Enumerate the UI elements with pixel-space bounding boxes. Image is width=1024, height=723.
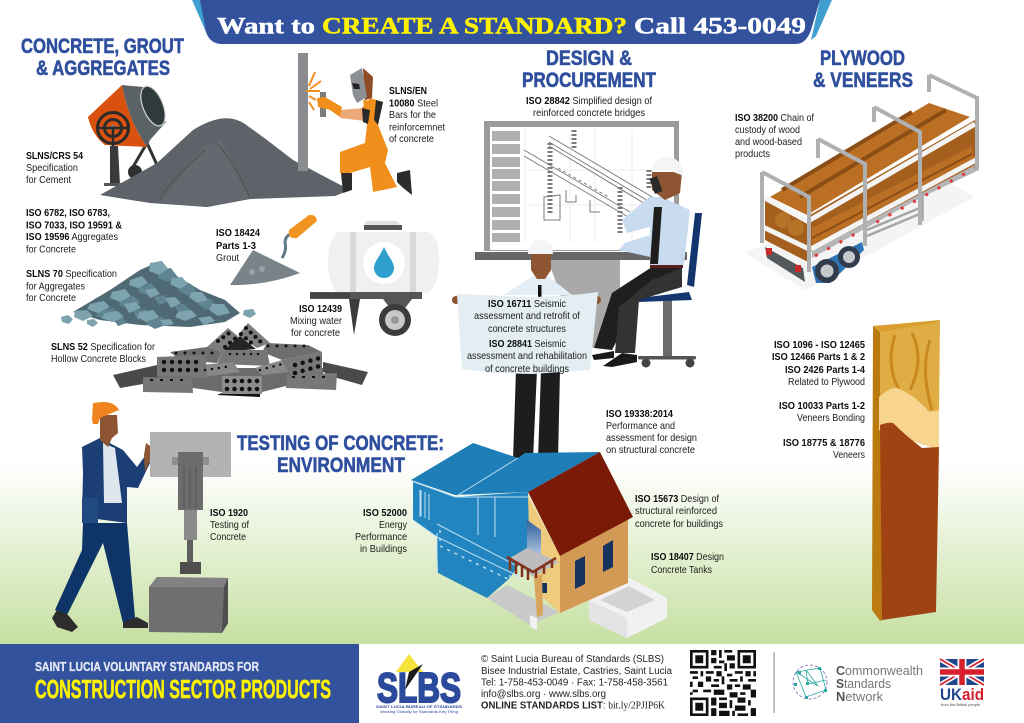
trailer white rails: [763, 124, 976, 249]
text: ISO 38200: ISO 38200 Chain of: [735, 112, 814, 124]
logo: UK aid: from the British people: [941, 702, 981, 707]
text: SLNS/CRS 54: Specification: [26, 162, 78, 174]
house slab: [487, 585, 559, 625]
house yellow gable: [528, 495, 560, 613]
footer panel: [0, 644, 1024, 723]
text: ISO 38200: and wood-based: [735, 136, 802, 148]
illustration: plywood plank: [872, 320, 940, 621]
logo: UK aid: UKaid: [940, 685, 984, 704]
text: ISO 19338:2014: ISO 19338:2014: [606, 408, 673, 420]
text: plywood standards: [772, 339, 865, 461]
text: ISO 18407: ISO 18407 Design: [651, 551, 724, 563]
bridge drawing: [524, 130, 659, 233]
heading: concrete, grout and aggregates: [21, 35, 184, 80]
water drop icon: [374, 247, 394, 278]
logs body: [810, 120, 975, 252]
footer panel: CONSTRUCTION SECTOR PRODUCTS: [35, 674, 331, 704]
house tan side wall: [560, 519, 628, 613]
contact details: info@slbs.org · www.slbs.org: [481, 689, 606, 700]
heading: concrete, grout and aggregates: CONCRETE, GROUT: [21, 35, 184, 58]
logo: SLBS: SLBS: [377, 664, 461, 711]
divider: [774, 652, 775, 713]
worker head and hat: [100, 415, 118, 447]
text: ISO 52000: in Buildings: [360, 543, 407, 555]
text: plywood standards: ISO 2426 Parts 1-4: [785, 364, 865, 376]
text: ISO 16711 and ISO 28841 on blueprint: concrete structures: [488, 323, 566, 335]
QR code: [690, 650, 756, 716]
text: ISO 15673: [635, 493, 723, 530]
header banner: [192, 0, 832, 44]
text: SLNS/EN 10080: [389, 85, 445, 145]
jackhammer: [150, 432, 231, 477]
logo: UK aid: [940, 659, 984, 707]
text: ISO 28842: [526, 95, 652, 119]
centre blocks: [217, 350, 270, 366]
text: ISO 52000: Energy: [379, 519, 408, 531]
illustration: cement pile: [100, 118, 350, 207]
text: ISO 12439: Mixing water: [290, 315, 342, 327]
text: ISO 16711 and ISO 28841 on blueprint: assessment and rehabilitation: [467, 350, 587, 362]
illustration: trowel: [230, 215, 317, 285]
text: aggregates for concrete: ISO 19596 Aggregates: [26, 231, 118, 243]
text: plywood standards: ISO 18775 & 18776: [783, 437, 865, 449]
illustration: design board with bridge drawing: [475, 121, 687, 350]
text: ISO 12439: [290, 303, 342, 339]
house balcony: [510, 548, 559, 577]
welder body: [340, 100, 397, 192]
text: SLNS/EN 10080: of concrete: [389, 133, 434, 145]
text: plywood standards: Veneers Bonding: [797, 412, 865, 424]
banner text: Want to: [217, 14, 315, 38]
illustration: house cross-section: [411, 443, 667, 638]
text: SLNS 70: for Aggregates: [26, 280, 85, 292]
text: ISO 19338:2014: on structural concrete: [606, 444, 695, 456]
contact details: Bisee Industrial Estate, Castries, Saint Lucia: [481, 666, 672, 677]
text: SLNS/EN 10080: 10080 Steel: [389, 98, 438, 110]
heading: testing of concrete, environment: [237, 432, 444, 477]
contact details: © Saint Lucia Bureau of Standards (SLBS): [481, 654, 664, 665]
logo: SLBS: SAINT LUCIA BUREAU OF STANDARDS: [376, 705, 463, 709]
text: SLNS 70: for Concrete: [26, 292, 76, 304]
text: ISO 18407: [651, 551, 724, 576]
heading: design and procurement: DESIGN &: [546, 47, 632, 70]
text: ISO 28842: ISO 28842 Simplified design of: [526, 95, 652, 107]
logo: SLBS: [376, 654, 463, 714]
worker legs: [55, 523, 135, 623]
illustration: worker with jackhammer: [52, 402, 231, 633]
text: ISO 16711 and ISO 28841 on blueprint: ISO 16711 Seismic: [488, 298, 566, 310]
text: SLNS 70: [26, 268, 117, 304]
text: ISO 18424: ISO 18424: [216, 227, 260, 239]
text: ISO 16711 and ISO 28841 on blueprint: of concrete buildings: [485, 363, 569, 375]
contact details: ONLINE STANDARDS LIST: bit.ly/2PJIP6K: [481, 700, 666, 712]
text: ISO 12439: ISO 12439: [299, 303, 342, 315]
text: plywood standards: Related to Plywood: [788, 376, 865, 388]
text: SLNS/CRS 54: for Cement: [26, 174, 71, 186]
text: SLNS 52: Hollow Concrete Blocks: [51, 353, 146, 365]
text: ISO 19338:2014: assessment for design: [606, 432, 697, 444]
banner text: [217, 14, 806, 38]
board swatches: [492, 131, 520, 242]
text: ISO 18424: [216, 227, 260, 264]
welder torch: [320, 92, 326, 117]
heading: design and procurement: PROCUREMENT: [522, 69, 656, 92]
text: ISO 16711 and ISO 28841 on blueprint: assessment and retrofit of: [474, 310, 580, 322]
banner text: Call 453-0049: [634, 14, 806, 38]
illustration: steel bar and welder: [298, 53, 412, 195]
back row: [170, 347, 223, 363]
text: ISO 38200: custody of wood: [735, 124, 800, 136]
house blue walls: [413, 482, 530, 598]
text: ISO 12439: for concrete: [291, 327, 340, 339]
text: ISO 18407: Concrete Tanks: [651, 564, 712, 576]
text: ISO 1920: ISO 1920: [210, 507, 248, 519]
side blocks: [157, 355, 208, 378]
text: ISO 52000: ISO 52000: [363, 507, 407, 519]
text: ISO 38200: [735, 112, 814, 160]
base wedges: [113, 365, 157, 388]
contact details: [481, 654, 672, 712]
logs top layer: [770, 103, 970, 215]
text: ISO 52000: [355, 507, 408, 555]
peak blocks: [207, 328, 240, 353]
house red roof: [528, 452, 633, 556]
illustration: water tank trailer: [310, 221, 439, 336]
trailer stanchions: [762, 75, 977, 272]
banner text: CREATE A STANDARD?: [322, 14, 627, 38]
text: plywood standards: ISO 1096 - ISO 12465: [774, 339, 865, 351]
trailer fender and wheels: [812, 242, 864, 283]
text: ISO 19338:2014: [606, 408, 697, 456]
log ends: [765, 200, 808, 262]
trousers: [594, 267, 682, 350]
text: ISO 1920: Concrete: [210, 531, 246, 543]
illustration: hollow concrete blocks: [113, 323, 368, 397]
text: plywood standards: Veneers: [833, 449, 865, 461]
text: ISO 18424: Parts 1-3: [216, 240, 256, 252]
text: ISO 38200: products: [735, 148, 770, 160]
text: ISO 1920: [210, 507, 249, 543]
illustration: standing engineer with blueprint: [452, 240, 601, 460]
heading: plywood and veneers: & VENEERS: [813, 69, 913, 92]
text: ISO 15673: structural reinforced: [635, 505, 717, 517]
text: aggregates for concrete: for Concrete: [26, 244, 76, 256]
illustration: concrete mixer: [88, 83, 170, 186]
logo: Commonwealth Standards Network: [793, 663, 923, 704]
illustration: plywood trailer: [745, 75, 979, 290]
heading: testing of concrete, environment: TESTING OF CONCRETE:: [237, 432, 444, 455]
table: [548, 260, 620, 350]
text: aggregates for concrete: ISO 7033, ISO 19591 &: [26, 220, 122, 232]
text: ISO 19338:2014: Performance and: [606, 420, 675, 432]
head and hard hat: [652, 172, 682, 200]
illustration: aggregate stone pile: [61, 261, 256, 329]
concrete test block: [149, 577, 228, 633]
text: ISO 18424: Grout: [216, 252, 239, 264]
text: SLNS/EN 10080: SLNS/EN: [389, 85, 427, 97]
text: SLNS/EN 10080: reinforcemnet: [389, 122, 445, 134]
text: SLNS 52: [51, 341, 155, 365]
worker torso: [82, 438, 150, 523]
text: ISO 15673: concrete for buildings: [635, 518, 723, 530]
heading: plywood and veneers: [813, 47, 913, 92]
text: aggregates for concrete: ISO 6782, ISO 6783,: [26, 207, 110, 219]
logs lower layer: [812, 146, 974, 245]
heading: plywood and veneers: PLYWOOD: [820, 47, 905, 70]
contact details: Tel: 1-758-453-0049 · Fax: 1-758-458-3561: [481, 678, 668, 688]
text: SLNS/EN 10080: Bars for the: [389, 109, 436, 121]
text: ISO 15673: ISO 15673 Design of: [635, 493, 719, 505]
text: ISO 52000: Performance: [355, 531, 407, 543]
logo: Commonwealth Standards Network: Network: [836, 689, 883, 704]
text: SLNS/CRS 54: SLNS/CRS 54: [26, 150, 83, 162]
text: SLNS/CRS 54: [26, 150, 83, 186]
logo: SLBS: Working Globally for Standards Key Thing: [380, 710, 458, 714]
logo: Commonwealth Standards Network: Standards: [836, 676, 891, 691]
text: plywood standards: ISO 10033 Parts 1-2: [779, 400, 865, 412]
text: aggregates for concrete: [26, 207, 122, 256]
text: SLNS 52: SLNS 52 Specification for: [51, 341, 155, 353]
heading: testing of concrete, environment: ENVIRONMENT: [277, 454, 405, 477]
text: ISO 28842: reinforced concrete bridges: [533, 107, 645, 119]
illustration: seated engineer: [592, 157, 702, 368]
union flag: [940, 659, 984, 685]
front blocks: [143, 377, 193, 393]
house blue roof: [411, 443, 600, 495]
logo: Commonwealth Standards Network: Commonwealth: [836, 663, 923, 678]
house platform: [589, 577, 667, 638]
heading: concrete, grout and aggregates: & AGGREGATES: [36, 57, 170, 80]
shirt and arm: [619, 197, 690, 265]
welder head: [363, 68, 373, 100]
text: plywood standards: ISO 12466 Parts 1 & 2: [772, 351, 865, 363]
footer title: SAINT LUCIA VOLUNTARY STANDARDS FOR: [35, 659, 259, 674]
trailer bed: [812, 157, 979, 258]
text: ISO 16711 and ISO 28841 on blueprint: [467, 298, 587, 375]
heading: design and procurement: [522, 47, 656, 92]
text: ISO 1920: Testing of: [210, 519, 249, 531]
text: SLNS 70: SLNS 70 Specification: [26, 268, 117, 280]
text: ISO 16711 and ISO 28841 on blueprint: ISO 28841 Seismic: [489, 338, 566, 350]
